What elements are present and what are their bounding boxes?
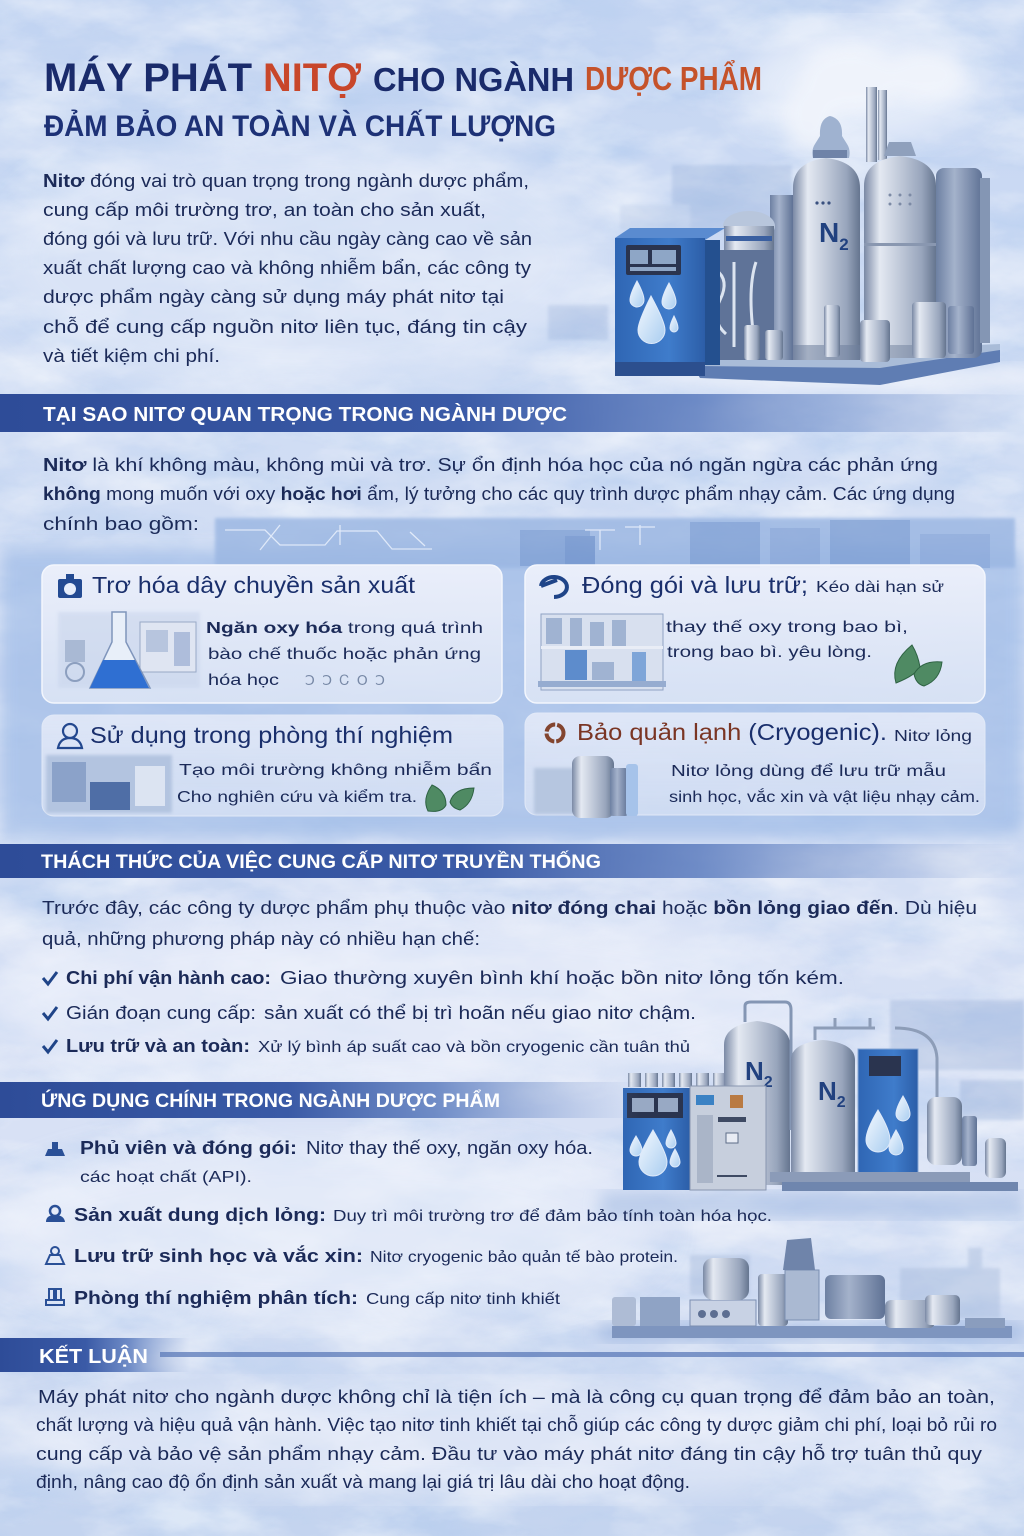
top manifold [815,1018,937,1108]
item: liquid production: Sản xuất dung dịch lỏng: [74,1204,326,1225]
paragraph: nitrogen properties: chính bao gồm: [43,513,199,534]
icon: green leaves [895,645,942,686]
title [44,55,762,143]
paragraph: nitrogen properties [43,454,955,534]
intro paragraph: Nitơ đóng vai trò quan trọng trong ngành dược phẩm, [43,170,529,191]
card body [666,619,908,661]
medium N2 tank [791,1040,855,1182]
intro paragraph: chỗ để cung cấp nguồn nitơ liên tục, đáng tin cậy [43,316,528,337]
item: analytical lab [46,1287,561,1308]
tall N2 tank [724,1021,790,1185]
card body [669,761,980,806]
illustration: generator group with N2 tanks [623,1002,1018,1191]
title line 2: ĐẢM BẢO AN TOÀN VÀ CHẤT LƯỢNG [44,109,556,143]
icon: camera badge [58,574,82,598]
card body: Nitơ lỏng dùng để lưu trữ mẫu [671,761,946,780]
intro paragraph: cung cấp môi trường trơ, an toàn cho sản xuất, [43,199,486,220]
applications list [45,1137,772,1308]
city strip behind cards [215,518,1015,568]
card body [206,620,483,689]
item: storage and safety: Xử lý bình áp suất cao và bồn cryogenic cần tuân thủ [258,1039,690,1056]
item: biological storage: Nitơ cryogenic bảo quản tế bào protein. [370,1249,678,1266]
card heading: Sử dụng trong phòng thí nghiệm [90,722,453,748]
front auxiliary tanks [912,302,946,358]
conclusion paragraph [36,1386,997,1492]
card body: Tạo môi trường không nhiễm bẩn [179,760,492,779]
section band: conclusion: KẾT LUẬN [39,1344,148,1368]
card: packaging and storage [525,565,985,703]
intro paragraph: và tiết kiệm chi phí. [43,345,220,366]
card body: Ngăn oxy hóa trong quá trình [206,620,483,637]
N2 label: N [819,217,839,248]
card body: thay thế oxy trong bao bì, [666,619,908,636]
tank with N2 [793,116,860,360]
icon: ring [546,724,564,742]
blue box with drops [623,1088,690,1190]
icon: green leaves [426,785,474,811]
illustration: generator group with N2 tanks: 2 [764,1074,773,1091]
rear tanks [936,168,982,358]
card: laboratory use [42,715,503,816]
distant building behind hero [548,165,792,340]
conclusion paragraph: cung cấp và bảo vệ sản phẩm nhạy cảm. Đầu tư vào máy phát nitơ đáng tin cậy hỗ trợ tuân thủ quy [36,1443,983,1464]
item: storage and safety: Lưu trữ và an toàn: [66,1035,250,1056]
illustration: generator group with N2 tanks: 2 [837,1094,846,1111]
card zone backdrop [0,548,1024,838]
item: tablets and packaging [45,1137,593,1186]
illustration: storage shelf [538,614,666,690]
blue panel [858,1049,918,1173]
item: tablets and packaging: Nitơ thay thế oxy, ngăn oxy hóa. [306,1137,593,1158]
intro paragraph [43,170,532,366]
large tank [864,142,936,358]
card heading [582,572,944,598]
card heading: Kéo dài hạn sử [816,579,944,596]
card body: sinh học, vắc xin và vật liệu nhạy cảm. [669,787,980,806]
icon: user [58,724,82,748]
section band: traditional supply challenges: THÁCH THỨC CỦA VIỆC CUNG CẤP NITƠ TRUYỀN THỐNG [41,851,601,873]
small vessels row [628,1073,726,1087]
base platform [782,1182,1018,1191]
title line 1: NITỢ [263,56,362,100]
small tanks right [927,1097,962,1165]
item: liquid production: Duy trì môi trường trơ để đảm bảo tính toàn hóa học. [333,1207,772,1225]
card heading: Trơ hóa dây chuyền sản xuất [92,572,416,598]
item: liquid production [46,1204,772,1225]
card body: ꓛ ꓛ Ꮯ ꓳ ꓛ [305,672,385,688]
item: analytical lab: Cung cấp nitơ tinh khiết [366,1291,561,1308]
card body: trong bao bì. yêu lòng. [667,644,872,661]
card heading: Nitơ lỏng [894,728,972,745]
grey control cabinet [690,1086,766,1190]
card body: bào chế thuốc hoặc phản ứng [208,646,481,663]
illustration: cryogenic tanks [534,756,638,818]
item: biological storage [46,1245,678,1266]
illustration: lab flask [58,612,200,688]
checklist: limitations [43,967,844,1056]
intro paragraph: đóng gói và lưu trữ. Với nhu cầu ngày càng cao về sản [43,228,532,249]
illustration: pharmaceutical equipment row [612,1238,1012,1338]
card body: hóa học [208,672,279,689]
section band: why nitrogen matters: TẠI SAO NITƠ QUAN TRỌNG TRONG NGÀNH DƯỢC [43,403,567,426]
icon: cycle arrow [541,577,567,597]
item: operating cost [43,967,844,988]
exhaust stacks [866,87,877,162]
title line 1: MÁY PHÁT [44,55,252,100]
platform [690,347,1000,385]
item: supply interruption: Gián đoạn cung cấp: [66,1002,256,1023]
conclusion paragraph: Máy phát nitơ cho ngành dược không chỉ là tiện ích – mà là công cụ quan trọng để đảm bảo an toàn, [38,1386,995,1407]
card: cryogenic storage [525,713,985,818]
section band: main applications: ỨNG DỤNG CHÍNH TRONG NGÀNH DƯỢC PHẨM [41,1090,500,1112]
section band: conclusion [0,1338,1024,1372]
paragraph: challenges intro: Trước đây, các công ty dược phẩm phụ thuộc vào nitơ đóng chai hoặc bồn lỏng giao đến . Dù hiệu [42,897,977,918]
card: production line inerting [42,565,502,703]
illustration: generator group with N2 tanks: N [745,1056,764,1086]
item: biological storage: Lưu trữ sinh học và vắc xin: [74,1245,363,1266]
item: tablets and packaging: Phủ viên và đóng gói: [80,1137,297,1158]
ground under hero [630,364,1024,392]
piping assembly [708,195,840,360]
illustration: generator group with N2 tanks: N [818,1076,837,1106]
section band: main applications [0,1082,640,1118]
paragraph: nitrogen properties: Nitơ là khí không màu, không mùi và trơ. Sự ổn định hóa học của nó ngăn ngừa các phản ứng [43,454,938,475]
card heading: Bảo quản lạnh (Cryogenic). [577,719,887,745]
N2 label: 2 [839,235,849,254]
blue generator cabinet [615,228,725,376]
title line 1 [44,55,762,100]
section band: traditional supply challenges [0,844,1024,878]
item: storage and safety [43,1035,690,1056]
section band: why nitrogen matters [0,394,1024,432]
item: operating cost: Chi phí vận hành cao: [66,967,271,988]
paragraph: nitrogen properties: không mong muốn với oxy hoặc hơi ẩm, lý tưởng cho các quy trình dược phẩm nhạy cảm. Các ứng dụng [43,483,955,504]
card body [177,760,492,806]
intro paragraph: dược phẩm ngày càng sử dụng máy phát nitơ tại [43,286,504,307]
conclusion paragraph: chất lượng và hiệu quả vận hành. Việc tạo nitơ tinh khiết tại chỗ giúp các công ty dược giảm chi phí, loại bỏ rủi ro [36,1414,997,1435]
water drops on cabinet [630,281,678,344]
card body: Cho nghiên cứu và kiểm tra. [177,788,417,806]
title line 1: CHO NGÀNH [373,61,574,98]
item: supply interruption: sản xuất có thể bị trì hoãn nếu giao nitơ chậm. [264,1002,696,1023]
item: operating cost: Giao thường xuyên bình khí hoặc bồn nitơ lỏng tốn kém. [280,967,844,988]
illustration: lab bench [46,755,172,813]
ground under equipment [600,1192,1024,1218]
item: tablets and packaging: các hoạt chất (API). [80,1169,252,1186]
card heading: Đóng gói và lưu trữ; [582,572,808,598]
steam cloud [784,46,965,149]
intro paragraph: xuất chất lượng cao và không nhiễm bẩn, các công ty [43,257,532,278]
item: supply interruption [43,1002,696,1023]
paragraph: challenges intro: quả, những phương pháp này có nhiều hạn chế: [42,928,480,949]
hero illustration: nitrogen generator plant [615,46,1000,385]
paragraph: challenges intro [42,897,977,949]
conclusion paragraph: định, nâng cao độ ổn định sản xuất và mang lại giá trị lâu dài cho hoạt động. [36,1471,690,1492]
item: analytical lab: Phòng thí nghiệm phân tích: [74,1287,358,1308]
title line 1: DƯỢC PHẨM [585,60,762,97]
